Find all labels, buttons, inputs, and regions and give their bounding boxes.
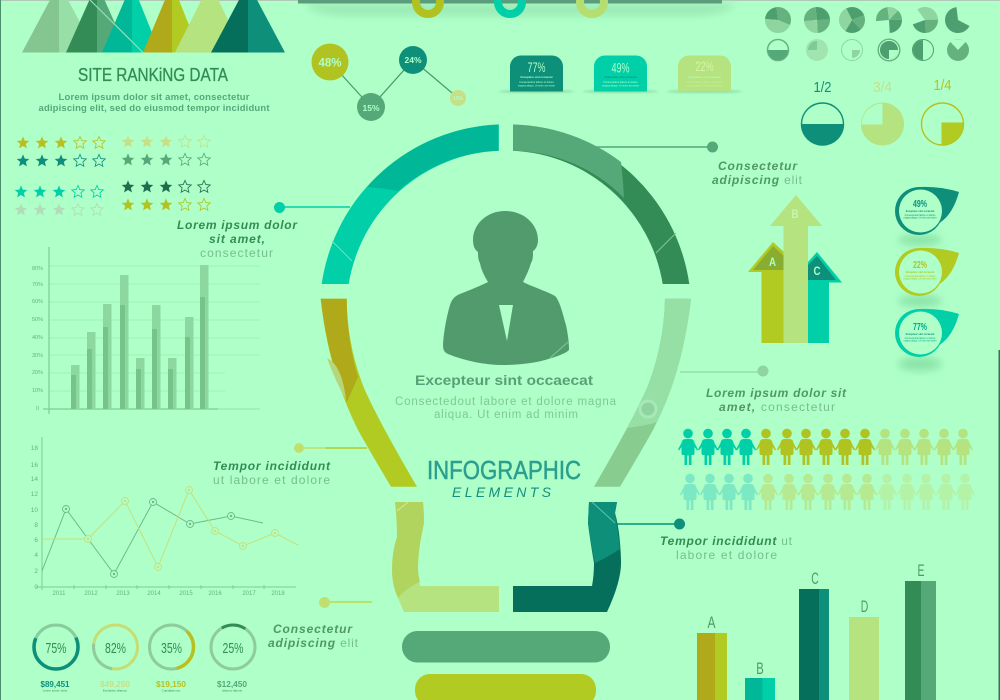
bubble line chart: 48%: [318, 58, 342, 70]
line chart: 16: [31, 462, 38, 469]
donut 82%: Excitation ullamco: [103, 688, 127, 692]
bar E: [905, 561, 936, 700]
bulb segment: top right: [513, 124, 689, 284]
badge 22%: magna aliqua. Ut enim ad minim: [904, 278, 937, 280]
card 22%: magna aliqua. Ut enim ad minim: [686, 84, 723, 88]
line chart: 2016: [208, 591, 222, 597]
title: infographic elements: [427, 455, 581, 500]
callout: tempor incididunt right: [615, 518, 793, 562]
bar chart: [32, 247, 260, 414]
top bar with rings: [298, 0, 735, 16]
card 22%: [666, 55, 742, 92]
donut 35%: [150, 625, 194, 692]
teardrop badges: [895, 187, 959, 371]
fraction one half: [802, 79, 844, 145]
bulb base: upper pill: [402, 631, 610, 662]
badge 49%: Excepteur sint occaecat: [906, 210, 934, 213]
card 49%: Consectedout labore et dolore: [603, 80, 638, 84]
bulb base: lower pill: [415, 674, 596, 700]
donut 82%: $49,250: [100, 679, 130, 689]
donut 75%: Lorem ipsum dolor: [43, 688, 67, 692]
badge 49%: [895, 187, 959, 246]
callout: consectetur top right: Consectetur: [718, 159, 798, 173]
light bulb: [321, 124, 691, 700]
bulb segment: bottom right: [513, 502, 621, 612]
heading: site ranking data: Lorem ipsum dolor sit amet, consectetur: [58, 92, 250, 103]
line chart: 2017: [242, 591, 256, 597]
bar chart: 20%: [32, 370, 43, 376]
card 49%: 49%: [612, 60, 630, 76]
bar C: [799, 569, 829, 700]
callout: tempor incididunt right: Tempor incididunt ut: [660, 534, 793, 548]
line chart: 2011: [53, 591, 66, 597]
arrow C: C: [814, 264, 821, 278]
callout: lorem ipsum left: Lorem ipsum dolor: [177, 218, 298, 232]
callout: lorem ipsum left: [177, 202, 350, 260]
triangle chart: [22, 0, 285, 52]
callout: lorem ipsum right: [680, 366, 847, 414]
bubble line chart: [312, 44, 466, 121]
central text block: aliqua. Ut enim ad minim: [434, 409, 578, 421]
card 77%: Excepteur sint occaecat: [520, 75, 553, 79]
star ratings: [15, 135, 210, 215]
heading: site ranking data: SITE RANKiNG DATA: [78, 65, 228, 85]
badge 77%: Consectedout labore et dolore: [905, 337, 936, 340]
arrow B: [770, 195, 822, 343]
bulb segment: right: [594, 299, 691, 487]
line chart: 2013: [116, 591, 130, 597]
bar chart: 60%: [32, 299, 43, 305]
bar chart: 50%: [32, 317, 43, 323]
line chart: 4: [34, 552, 38, 559]
line chart: 2012: [84, 591, 98, 597]
badge 22%: Excepteur sint occaecat: [906, 271, 934, 274]
line chart: 2014: [147, 591, 161, 597]
arrow A: [748, 242, 784, 343]
callout: tempor incididunt left: [213, 443, 367, 487]
bar C: C: [811, 569, 819, 588]
line chart: 2018: [271, 591, 285, 597]
central text block: Excepteur sint occaecat: [415, 372, 593, 388]
callout: lorem ipsum left: consectetur: [200, 246, 273, 260]
callout: consectetur top right: [595, 142, 803, 187]
badge 22%: 22%: [913, 260, 927, 271]
bar chart: 70%: [32, 282, 43, 288]
heading: site ranking data: adipiscing elit, sed do eiusmod tempor incididunt: [38, 103, 270, 114]
bubble line chart: 13%: [453, 96, 464, 102]
badge 49%: magna aliqua. Ut enim ad minim: [904, 216, 937, 220]
card 22%: 22%: [696, 58, 714, 74]
badge 49%: 49%: [913, 199, 927, 210]
card 22%: Excepteur sint occaecat: [688, 75, 721, 79]
title: infographic elements: INFOGRAPHIC: [427, 455, 581, 485]
arrow B: B: [792, 207, 799, 221]
bar chart: 10%: [32, 388, 43, 394]
card 77%: Consectedout labore et dolore: [519, 80, 554, 84]
donut 35%: $19,150: [156, 679, 186, 689]
callout: lorem ipsum left: sit amet,: [209, 232, 265, 246]
callout: tempor incididunt right: labore et dolore: [676, 548, 777, 562]
donut 25%: $12,450: [217, 679, 247, 689]
arrow A: A: [769, 255, 776, 269]
bar D: D: [861, 597, 868, 616]
card 77%: magna aliqua. Ut enim ad minim: [518, 84, 555, 88]
donut 25%: 25%: [222, 640, 244, 657]
line chart: 2: [34, 568, 38, 575]
bar D: [849, 597, 879, 700]
line chart: 10: [31, 507, 38, 514]
central text block: [395, 372, 617, 421]
donut 25%: [211, 625, 255, 692]
donut 75%: $89,451: [40, 679, 70, 689]
callout: lorem ipsum right: Lorem ipsum dolor sit: [706, 386, 847, 400]
bar chart: 40%: [32, 335, 43, 341]
donut 35%: 35%: [161, 640, 182, 657]
people pictogram: [678, 429, 975, 510]
callout: consectetur top right: adipiscing elit: [712, 173, 803, 187]
central text block: Consectedout labore et dolore magna: [395, 396, 617, 408]
donut 75%: 75%: [46, 640, 66, 657]
line chart: 8: [34, 522, 38, 529]
bar B: [745, 659, 775, 700]
callout: lorem ipsum right: amet, consectetur: [719, 400, 835, 414]
badge 77%: [895, 309, 959, 371]
badge 22%: [895, 248, 959, 307]
card 77%: [498, 55, 574, 92]
callout: tempor incididunt left: ut labore et dolore: [213, 473, 330, 487]
fraction charts: [802, 77, 964, 146]
small pie charts: [772, 14, 964, 26]
bar E: E: [918, 561, 924, 580]
bulb segment: top left: [322, 124, 499, 284]
heading: site ranking data: [38, 65, 270, 114]
bubble line chart: 24%: [404, 55, 422, 65]
callout: consectetur bottom left: Consectetur: [273, 622, 353, 636]
badge 77%: 77%: [913, 322, 927, 333]
bottom bar chart: [697, 561, 936, 700]
arrow chart: [748, 195, 842, 343]
fraction one half: 1/2: [814, 79, 832, 96]
donut 82%: 82%: [105, 640, 126, 657]
bar chart: 80%: [32, 266, 43, 272]
card 49%: magna aliqua. Ut enim ad minim: [602, 84, 639, 88]
card 22%: Consectedout labore et dolore: [687, 80, 722, 84]
icon: person silhouette: [443, 211, 569, 365]
title: infographic elements: ELEMENTS: [452, 484, 552, 500]
callout: consectetur bottom left: [268, 597, 372, 650]
line chart: [31, 437, 298, 597]
badge 77%: Excepteur sint occaecat: [906, 333, 934, 336]
line chart: 6: [34, 537, 38, 544]
bar A: [697, 613, 727, 700]
line chart: 14: [31, 476, 38, 483]
fraction three quarters: 3/4: [873, 79, 892, 96]
stat cards: [498, 55, 742, 92]
line chart: 0: [34, 584, 38, 591]
bubble line chart: 15%: [362, 103, 380, 113]
card 77%: 77%: [528, 59, 546, 75]
badge 77%: magna aliqua. Ut enim ad minim: [904, 340, 937, 342]
arrow C: [808, 252, 842, 343]
bulb segment: left: [321, 299, 417, 487]
card 49%: [582, 55, 658, 92]
line chart: 18: [31, 445, 38, 452]
donut 35%: Cupidatat non: [162, 688, 181, 692]
small ring pies: [768, 39, 969, 61]
bar chart: 0: [36, 406, 39, 412]
bar A: A: [708, 613, 716, 632]
fraction three quarters: [861, 79, 904, 146]
donut 25%: ullamco laboris: [222, 688, 243, 692]
fraction one quarter: [922, 77, 964, 145]
line chart: 2015: [179, 591, 193, 597]
bulb segment: bottom left: [392, 502, 499, 612]
badge 22%: Consectedout labore et dolore: [905, 275, 936, 278]
donut 75%: [34, 625, 78, 692]
bar B: B: [756, 659, 764, 678]
fraction one quarter: 1/4: [934, 77, 952, 94]
line chart: 12: [31, 491, 38, 498]
card 49%: Excepteur sint occaecat: [604, 75, 637, 79]
donut 82%: [94, 625, 138, 692]
callout: consectetur bottom left: adipiscing elit: [268, 636, 359, 650]
bar chart: 30%: [32, 353, 43, 359]
donut charts: [34, 625, 255, 692]
badge 49%: Consectedout labore et dolore: [905, 214, 936, 217]
callout: tempor incididunt left: Tempor incididunt: [213, 459, 331, 473]
